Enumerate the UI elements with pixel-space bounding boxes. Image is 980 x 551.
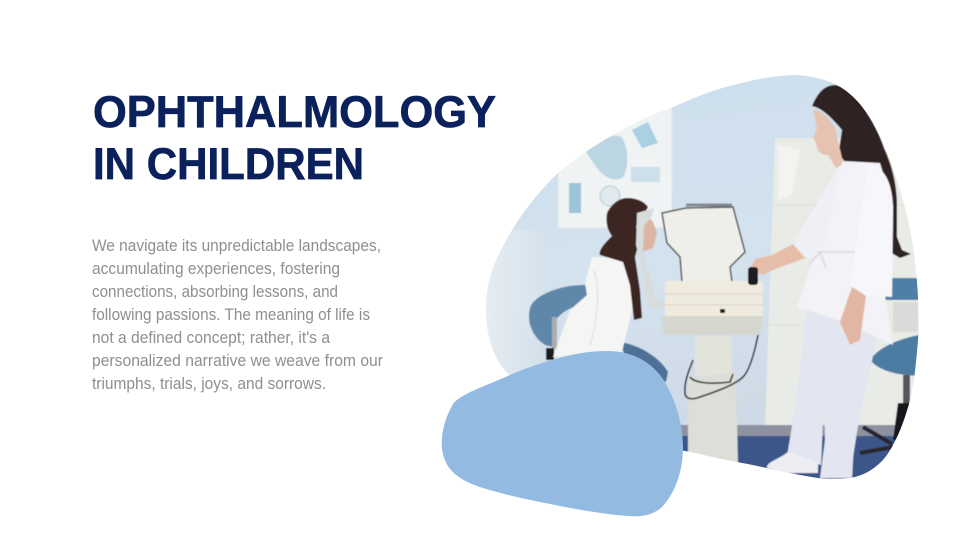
body paragraph: connections, absorbing lessons, and	[92, 283, 338, 301]
title	[93, 88, 496, 189]
blue decorative blob	[442, 351, 683, 516]
child face	[636, 215, 657, 252]
doctor dress	[797, 161, 893, 345]
wall poster	[558, 105, 672, 228]
child in white hoodie	[553, 198, 657, 357]
right chair	[860, 278, 925, 453]
baseboard and floor	[680, 424, 896, 479]
left chair	[529, 285, 668, 382]
doctor shoe	[767, 452, 818, 473]
body paragraph: triumphs, trials, joys, and sorrows.	[92, 375, 326, 393]
cable	[685, 335, 758, 399]
photo: doctor examining child's eyes, clipped to blob	[480, 70, 925, 485]
body paragraph: not a defined concept; rather, it's a	[92, 329, 331, 347]
doctor trousers	[787, 305, 877, 478]
doctor face and neck	[813, 110, 846, 168]
wall	[486, 75, 880, 426]
doctor hair	[812, 85, 911, 258]
machine stand	[661, 316, 763, 465]
body paragraph	[92, 237, 383, 393]
body paragraph: We navigate its unpredictable landscapes,	[92, 237, 381, 255]
right wall tiles	[765, 138, 925, 428]
body paragraph: following passions. The meaning of life is	[92, 306, 370, 324]
chin rest	[636, 208, 666, 307]
autorefractor machine	[662, 205, 763, 318]
title: OPHTHALMOLOGY	[93, 88, 496, 137]
body paragraph: personalized narrative we weave from our	[92, 352, 383, 370]
child hair	[600, 198, 648, 320]
doctor left arm	[792, 165, 840, 260]
title: IN CHILDREN	[93, 140, 364, 189]
doctor	[748, 85, 911, 478]
body paragraph: accumulating experiences, fostering	[92, 260, 340, 278]
doctor right arm and hand	[854, 171, 894, 298]
